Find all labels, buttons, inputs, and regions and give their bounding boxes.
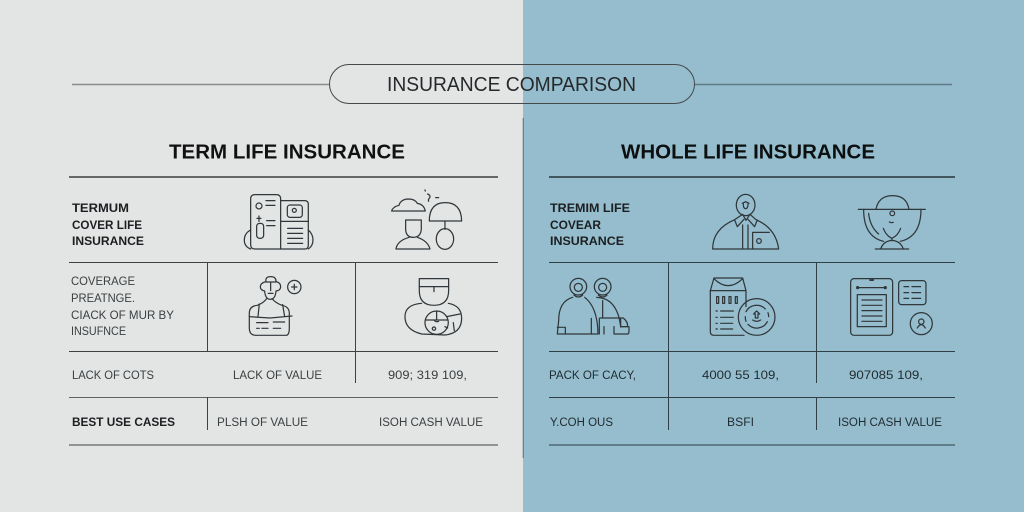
- text: term row 4: PLSH OF VALUE: [217, 417, 308, 429]
- text: whole row 4: ISOH CASH VALUE: [838, 417, 942, 429]
- icon: bowl with dome: [858, 196, 925, 249]
- text: whole row 1 label: COVEAR: [550, 220, 602, 232]
- text: whole row 3: PACK OF CACY,: [549, 370, 636, 382]
- title banner: [72, 64, 952, 104]
- text: term row 2 label: [71, 276, 174, 338]
- text: term row 1 label: TERMUM: [72, 203, 129, 215]
- icon: clipboard with list and badge: [851, 279, 932, 335]
- text: whole row 4: Y.COH OUS: [550, 417, 613, 429]
- table: term life grid: [69, 177, 498, 445]
- text: term row 2 label: CIACK OF MUR BY: [71, 310, 174, 322]
- text: term row 1 label: COVER LIFE: [72, 220, 142, 232]
- text: term row 2 label: PREATNGE.: [71, 293, 135, 305]
- text: whole row 3: [549, 370, 923, 382]
- icon: person with cloud and umbrella: [392, 190, 462, 249]
- text: term row 2 label: COVERAGE: [71, 276, 135, 288]
- text: term row 4: ISOH CASH VALUE: [379, 417, 483, 429]
- icon: person with coin shield: [405, 279, 462, 335]
- title banner: INSURANCE COMPARISON: [387, 74, 636, 96]
- text: term row 3: [72, 370, 467, 382]
- icon: calculator card with coin: [710, 278, 775, 335]
- icon: advisor in shirt and tie: [713, 194, 779, 249]
- text: whole row 1 label: [550, 203, 630, 248]
- text: term row 2 label: INSUFNCE: [71, 326, 126, 338]
- heading: term life insurance: TERM LIFE INSURANCE: [169, 142, 405, 164]
- text: term row 1 label: INSURANCE: [72, 236, 144, 248]
- text: term row 1 label: [72, 203, 144, 248]
- text: whole row 3: 907085 109,: [849, 370, 923, 382]
- table: whole life grid: [549, 177, 955, 445]
- text: term row 3: LACK OF VALUE: [233, 370, 322, 382]
- text: term row 3: 909; 319 109,: [388, 370, 467, 382]
- icon: elderly couple: [557, 278, 629, 334]
- background: left panel: [0, 0, 523, 512]
- text: whole row 1 label: INSURANCE: [550, 236, 624, 248]
- background: right panel: [523, 0, 1024, 512]
- heading: whole life insurance: WHOLE LIFE INSURANCE: [621, 142, 875, 164]
- center divider: [522, 118, 524, 458]
- text: term row 4: BEST USE CASES: [72, 417, 175, 429]
- icon: person with plus badge: [249, 277, 301, 335]
- text: whole row 3: 4000 55 109,: [702, 370, 779, 382]
- text: term row 4: [72, 417, 483, 429]
- text: term row 3: LACK OF COTS: [72, 370, 154, 382]
- text: whole row 1 label: TREMIM LIFE: [550, 203, 630, 215]
- icon: policy document folder: [244, 195, 313, 249]
- text: whole row 4: BSFI: [727, 417, 754, 429]
- text: whole row 4: [550, 417, 942, 429]
